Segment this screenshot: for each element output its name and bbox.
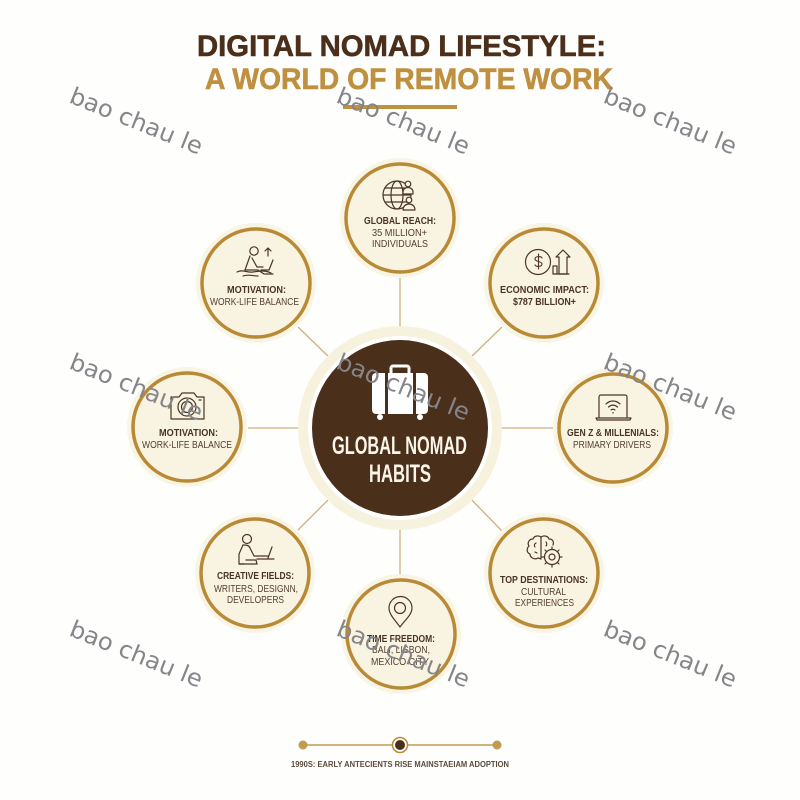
node: top destinations: TOP DESTINATIONS: [500,575,588,586]
node: motivation (work-life) [196,223,316,343]
node: global reach [340,158,460,278]
watermarks [66,82,741,693]
node: creative fields: DEVELOPERS [227,595,284,606]
watermarks: bao chau le [333,615,474,693]
watermarks: bao chau le [66,615,207,693]
node: time freedom: TIME FREEDOM: [367,634,435,645]
node: motivation (work-life): WORK-LIFE BALANCE [210,297,299,308]
icon: person with laptop on beach [237,247,273,276]
node: time freedom [341,574,461,694]
node: motivation (camera): WORK-LIFE BALANCE [142,440,232,451]
watermarks: bao chau le [600,82,741,160]
hub label: GLOBAL NOMAD [332,432,467,460]
node: global reach: GLOBAL REACH: [364,216,436,227]
watermarks: bao chau le [66,82,207,160]
node: economic impact: ECONOMIC IMPACT: [500,285,589,296]
icon: laptop with wifi [596,395,631,420]
node: creative fields: CREATIVE FIELDS: [217,571,294,582]
hub label [332,432,467,488]
watermarks: bao chau le [333,82,474,160]
title: A WORLD OF REMOTE WORK [205,63,613,96]
icon: map pin [389,596,412,627]
title underline [343,105,457,109]
node: motivation (camera) [127,367,247,487]
node: gen z and millennials: GEN Z & MILLENIALS: [567,428,659,439]
node: motivation (camera): MOTIVATION: [159,428,218,439]
node: economic impact [484,223,604,343]
icon: globe and people [383,181,415,210]
title [197,30,613,96]
icon: dollar and growth arrow [526,250,570,274]
hub label: HABITS [369,460,431,488]
connector lines [248,278,553,577]
node: global reach: INDIVIDUALS [372,239,428,250]
watermarks: bao chau le [66,348,207,426]
icon: camera [171,393,204,419]
timeline label: 1990S: EARLY ANTECIENTS RISE MAINSTAEIAM ADOPTION [291,760,509,769]
timeline [291,738,509,769]
central hub [303,331,497,525]
node: gen z and millennials [553,368,673,488]
node: creative fields [195,513,315,633]
icon: suitcase [372,366,428,420]
node: motivation (work-life): MOTIVATION: [227,285,286,296]
icon: person at laptop [239,534,274,564]
node: global reach: 35 MILLION+ [372,228,427,239]
icon: brain and gear [527,536,562,567]
watermarks: bao chau le [600,615,741,693]
title: DIGITAL NOMAD LIFESTYLE: [197,30,606,63]
node: economic impact: $787 BILLION+ [513,297,576,308]
node: top destinations [484,513,604,633]
watermarks: bao chau le [333,348,474,426]
node: gen z and millennials: PRIMARY DRIVERS [573,440,651,451]
node: top destinations: CULTURAL [521,587,566,598]
node: time freedom: BALI, LISBON, [372,645,430,656]
node: top destinations: EXPERIENCES [515,598,574,609]
node: time freedom: MEXICO CITY [371,657,429,668]
watermarks: bao chau le [600,348,741,426]
node: creative fields: WRITERS, DESIGNN, [214,584,298,595]
